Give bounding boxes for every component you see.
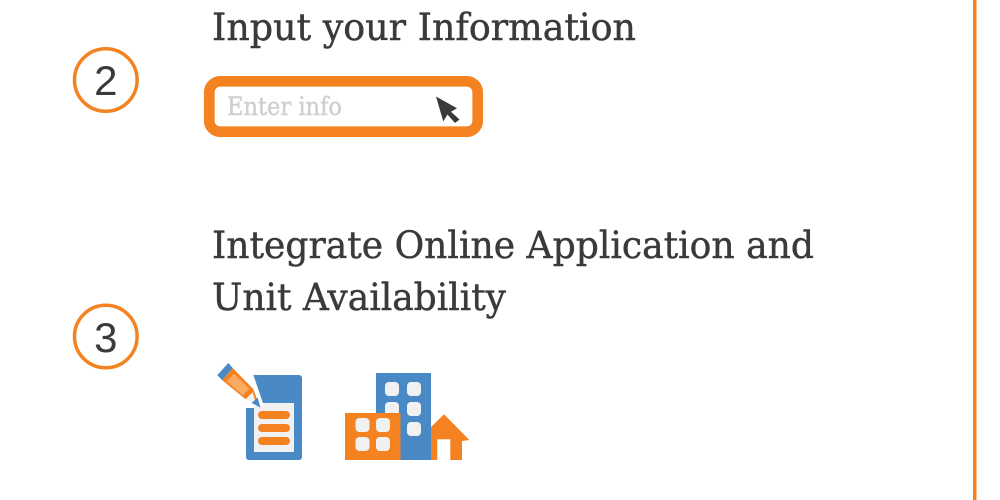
- step 3 heading: Integrate Online Application and: [212, 224, 814, 267]
- input field: [209, 81, 478, 132]
- icon: buildings and house: [345, 373, 469, 460]
- step 2 number badge: [74, 49, 137, 111]
- right border line: [973, 0, 976, 500]
- placeholder text: Enter info: [227, 92, 342, 121]
- step 2 number badge: 2: [94, 57, 117, 104]
- step 2 heading: Input your Information: [212, 6, 636, 49]
- step 3 heading: Unit Availability: [212, 276, 506, 319]
- step 3 heading: [212, 224, 814, 319]
- icon: application form with pencil: [217, 363, 302, 460]
- icon: mouse cursor: [436, 96, 460, 123]
- step 3 number badge: 3: [94, 314, 117, 361]
- step 3 number badge: [74, 305, 137, 368]
